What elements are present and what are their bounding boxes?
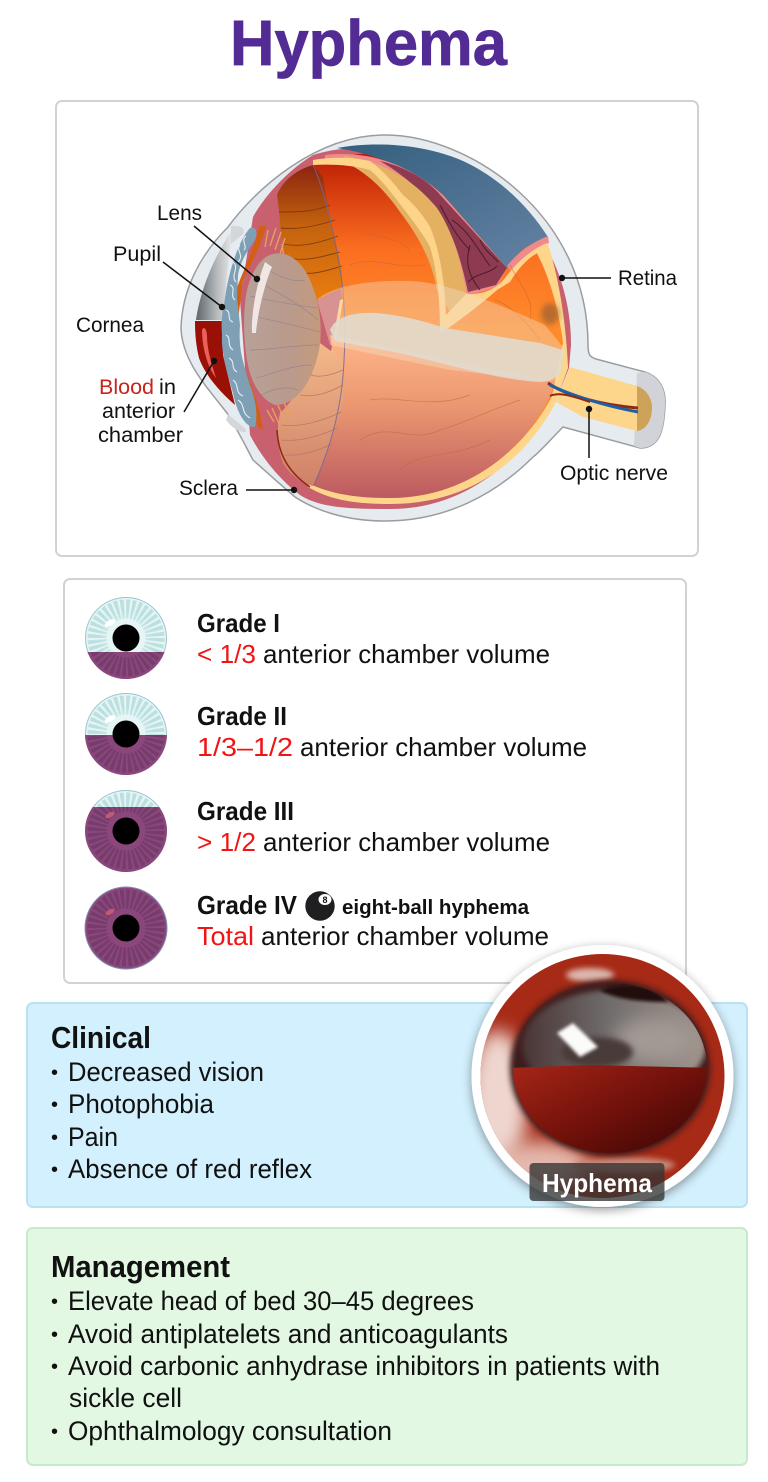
blue outer layer: [337, 144, 548, 268]
clinical list: Photophobia: [68, 1089, 215, 1119]
clinical heading: Clinical: [51, 1020, 151, 1055]
grade II text: [197, 701, 587, 762]
ora serrata line: [313, 165, 345, 485]
grade II text: Grade II: [197, 701, 287, 731]
panel: clinical: [27, 1003, 747, 1207]
label: optic nerve: Optic nerve: [560, 462, 668, 485]
vitreous tube: [330, 313, 563, 382]
clinical list: •: [51, 1159, 58, 1181]
management list: •: [51, 1421, 58, 1443]
management list: Ophthalmology consultation: [68, 1416, 392, 1446]
lens: [244, 253, 321, 405]
photo caption: [530, 1163, 664, 1201]
sclera outline: [181, 135, 665, 521]
optic nerve vessels: [548, 383, 638, 408]
clinical list: •: [51, 1062, 58, 1084]
optic nerve sheath: [556, 367, 637, 431]
panel: management: [27, 1228, 747, 1465]
label: pupil: [113, 243, 225, 310]
grade I text: Grade I: [197, 608, 280, 638]
retina yellow band: [308, 244, 568, 504]
grade II text: 1/3–1/2: [197, 732, 293, 762]
ciliary body lower: [278, 343, 343, 486]
management list: [51, 1286, 660, 1446]
photo: hyphema eye: [468, 945, 734, 1207]
management list: Avoid carbonic anhydrase inhibitors in patients with: [68, 1351, 660, 1381]
grade III row: [85, 790, 550, 872]
management list: •: [51, 1324, 58, 1346]
ciliary orange rim: [232, 226, 266, 430]
grade IV text: Total: [197, 921, 254, 951]
nerve end cap: [634, 372, 665, 448]
vitreous upper haze: [317, 281, 563, 382]
management heading: Management: [51, 1249, 230, 1284]
grade IV text: anterior chamber volume: [261, 921, 549, 951]
iris: [222, 228, 256, 427]
icon: grade II eye: [85, 693, 167, 775]
grade III text: anterior chamber volume: [263, 827, 550, 857]
label: blood in anterior chamber: in: [159, 376, 176, 399]
management list: Elevate head of bed 30–45 degrees: [68, 1286, 474, 1316]
label: lens: [157, 202, 260, 282]
grade I row: [85, 597, 550, 679]
label: cornea: Cornea: [76, 314, 144, 337]
zonule fibres: [265, 228, 290, 426]
grade IV text: Grade IV: [197, 890, 298, 920]
label: blood in anterior chamber: Blood: [99, 376, 154, 399]
icon: eight ball: [305, 891, 335, 921]
panel: grades: [64, 579, 686, 983]
interior fundus: [312, 153, 563, 498]
peeled retina rose: [380, 161, 507, 292]
eight-ball hyphema label: eight-ball hyphema: [342, 897, 530, 919]
management list: •: [51, 1291, 58, 1313]
label: blood in anterior chamber: [98, 358, 217, 447]
grade III text: [197, 796, 550, 857]
label: blood in anterior chamber: anterior: [102, 400, 175, 423]
icon: grade I eye: [85, 597, 167, 679]
clinical list: •: [51, 1127, 58, 1149]
management list: •: [51, 1356, 58, 1378]
lower vitreous tint: [312, 335, 555, 498]
grade II row: [85, 693, 587, 775]
clinical list: •: [51, 1094, 58, 1116]
label: retina: [559, 267, 677, 290]
peeled yellow band: [313, 158, 548, 332]
label: sclera: [179, 477, 297, 500]
clinical list: Decreased vision: [68, 1057, 264, 1087]
grade I text: < 1/3: [197, 639, 256, 669]
retinal vessels: [350, 230, 540, 470]
label: lens: Lens: [157, 202, 202, 225]
management list: sickle cell: [69, 1383, 182, 1413]
grade I text: anterior chamber volume: [263, 639, 550, 669]
clinical list: [51, 1057, 312, 1184]
peeled retina salmon: [325, 154, 507, 296]
label: sclera: Sclera: [179, 477, 238, 500]
grade III text: > 1/2: [197, 827, 256, 857]
grade I text: [197, 608, 550, 669]
choroid pink layer: [240, 147, 571, 509]
label: retina: Retina: [618, 267, 677, 290]
cornea highlight: [231, 226, 244, 244]
clinical list: Absence of red reflex: [68, 1154, 312, 1184]
icon: grade III eye: [85, 790, 167, 872]
grade IV text: [197, 890, 549, 951]
grade III text: Grade III: [197, 796, 294, 826]
anterior chamber gray: [196, 230, 232, 320]
label: blood in anterior chamber: chamber: [98, 424, 183, 447]
title: Hyphema: [230, 7, 507, 79]
grade II text: anterior chamber volume: [300, 732, 587, 762]
clinical list: Pain: [68, 1122, 118, 1152]
icon: grade IV eye: [85, 887, 167, 969]
label: optic nerve: [560, 406, 668, 485]
tan retinal back: [340, 156, 467, 312]
illustration: eye cross-section: [181, 135, 665, 521]
panel: eye anatomy: [56, 101, 698, 556]
blood in anterior chamber: [195, 321, 235, 405]
icon: eight ball: 8: [322, 895, 328, 905]
management list: Avoid antiplatelets and anticoagulants: [68, 1319, 508, 1349]
ciliary body upper: [277, 165, 343, 300]
photo caption: Hyphema: [542, 1168, 652, 1198]
label: pupil: Pupil: [113, 243, 161, 266]
grade IV row: [85, 887, 549, 969]
